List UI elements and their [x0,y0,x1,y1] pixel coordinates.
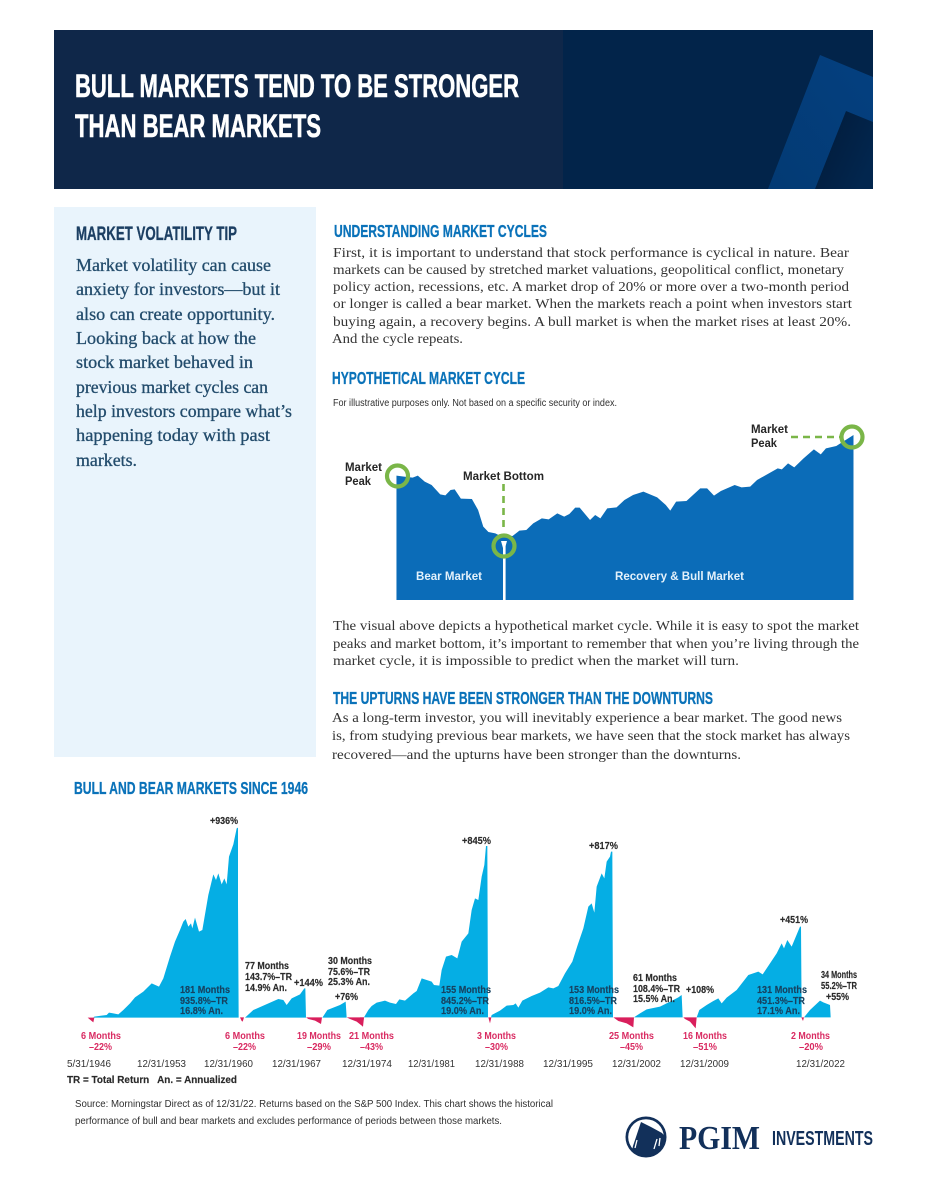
bull 2002 labels: 15.5% An. [633,994,675,1005]
logo: PGIM Investments [626,1116,873,1160]
marker: left market peak [387,466,408,486]
bull 1974 labels [441,836,491,1017]
text block: upturns [332,710,850,762]
bear market labels: 21 Months [349,1031,394,1042]
panel heading: MARKET VOLATILITY TIP [76,223,237,245]
chart: bull and bear markets since 1946 [67,816,858,1086]
text block: market cycles [332,245,852,346]
tip text: also can create opportunity. [76,304,275,324]
date axis: 12/31/1974 [342,1058,392,1070]
label: left market peak [345,460,382,488]
bull 2020 labels [821,970,858,1003]
text block: upturns: As a long-term investor, you will inevitably experience a bear market. The good news [332,710,842,725]
bull 2020 labels: +55% [826,992,849,1003]
bull 1987 labels: +817% [589,841,618,852]
bull 2020 labels: 34 Months [821,970,857,981]
chart key: TR = Total Return An. = Annualized [67,1074,237,1086]
source note: Source: Morningstar Direct as of 12/31/22. Returns based on the S&P 500 Index. This chart shows the historical [75,1099,553,1110]
bull market areas [93,828,831,1018]
label: right market peak: Market [751,422,788,436]
bull 1987 labels: 816.5%–TR [569,996,618,1007]
bull 1974 labels: +845% [462,836,491,847]
market peak dashed line [791,436,842,438]
bear market labels: –20% [799,1042,823,1053]
date axis [67,1058,845,1070]
logo: PGIM Investments: PGIM [679,1120,760,1157]
bull 1946 labels [180,816,238,1017]
bull 2002 labels: 108.4%–TR [633,984,681,995]
date axis: 5/31/1946 [67,1058,111,1070]
tip text: markets. [76,450,137,470]
bull 1970 labels [328,956,372,1003]
label: bear market: Bear Market [416,569,482,583]
bull 1987 labels: 153 Months [569,985,619,996]
heading: hypothetical market cycle: HYPOTHETICAL MARKET CYCLE [332,368,525,388]
bear market labels: –51% [693,1042,717,1053]
bull 1961 labels: +144% [294,978,323,989]
bull 2002 labels: +108% [686,985,714,996]
chart note: For illustrative purposes only. Not based on a specific security or index. [333,398,617,409]
bull 1961 labels [245,961,323,994]
date axis: 12/31/1981 [408,1058,455,1070]
label: right market peak [751,422,788,450]
bear market labels: 25 Months [609,1031,654,1042]
bear market labels: –43% [360,1042,383,1053]
bull 1961 labels: 77 Months [245,961,289,972]
marker: right market peak [842,426,862,448]
label: recovery and bull market: Recovery & Bull Market [615,569,744,583]
bull 1970 labels: 25.3% An. [328,977,370,988]
bull 1970 labels: 75.6%–TR [328,967,371,978]
bear market areas [88,1017,804,1028]
bear market labels: 6 Months [81,1031,121,1042]
panel: market volatility tip [54,207,316,757]
bull 2009 labels [757,915,808,1017]
date axis: 12/31/2022 [796,1058,845,1070]
bear market labels: 16 Months [683,1031,727,1042]
bear market labels: –30% [485,1042,508,1053]
date axis: 12/31/1960 [204,1058,253,1070]
bull 1961 labels: 14.9% An. [245,983,287,994]
text block: visual explanation: peaks and market bottom, it’s important to remember that when you’re living through the [333,636,859,651]
bear market labels: 3 Months [477,1031,516,1042]
text block: upturns: recovered—and the upturns have been stronger than the downturns. [332,747,741,762]
bull 1946 labels: 181 Months [180,985,230,996]
bull 1946 labels: 16.8% An. [180,1006,223,1017]
bear market labels: 6 Months [225,1031,265,1042]
bull 1946 labels: +936% [210,816,238,827]
market bottom dashed line [502,484,505,527]
bull 1974 labels: 845.2%–TR [441,996,490,1007]
label: market bottom: Market Bottom [463,469,544,483]
text block: visual explanation: The visual above depicts a hypothetical market cycle. While it is easy to spot the market [333,618,859,633]
date axis: 12/31/2002 [612,1058,661,1070]
marker: market bottom [494,536,514,556]
bull 1961 labels: 143.7%–TR [245,972,293,983]
tip text: help investors compare what’s [76,401,292,421]
label: right market peak: Peak [751,436,777,450]
bear market labels: –45% [620,1042,643,1053]
text block: market cycles: or longer is called a bear market. When the markets reach a point when investors start [333,296,852,311]
text block: market cycles: And the cycle repeats. [332,331,463,346]
bear market labels: –29% [307,1042,331,1053]
heading: understanding market cycles: UNDERSTANDING MARKET CYCLES [334,221,547,241]
text block: market cycles: buying again, a recovery begins. A bull market is when the market rises at least 20%. [333,314,851,329]
bear market labels: –22% [233,1042,256,1053]
text block: market cycles: policy action, recessions, etc. A market drop of 20% or more over a two-month period [333,279,849,294]
source note [75,1099,553,1127]
tip text: Looking back at how the [76,328,256,348]
date axis: 12/31/2009 [680,1058,729,1070]
bull 1974 labels: 155 Months [441,985,491,996]
tip text: anxiety for investors—but it [76,279,280,299]
tip text: stock market behaved in [76,352,253,372]
date axis: 12/31/1988 [475,1058,524,1070]
label: left market peak: Market [345,460,382,474]
date axis: 12/31/1953 [137,1058,186,1070]
bear market labels [81,1031,830,1053]
text block: market cycles: First, it is important to understand that stock performance is cyclical in nature. Bear [333,245,850,260]
tip text: happening today with past [76,425,270,445]
bull 2009 labels: 451.3%–TR [757,996,806,1007]
bull 1970 labels: 30 Months [328,956,372,967]
bull 1987 labels [569,841,619,1017]
tip text: Market volatility can cause [76,255,271,275]
heading: bull and bear markets since 1946: BULL AND BEAR MARKETS SINCE 1946 [74,778,308,798]
tip text: previous market cycles can [76,377,268,397]
bull 2002 labels: 61 Months [633,973,677,984]
bull 1987 labels: 19.0% An. [569,1006,612,1017]
bull 1946 labels: 935.8%–TR [180,996,229,1007]
title [75,68,519,144]
bear market labels: 19 Months [297,1031,341,1042]
text block: visual explanation [333,618,859,668]
date axis: 12/31/1967 [272,1058,321,1070]
bull 2020 labels: 55.2%–TR [821,981,858,992]
text block: market cycles: markets can be caused by stretched market valuations, geopolitical conflict, monetary [333,262,844,277]
source note: performance of bull and bear markets and excludes performance of periods between those markets. [75,1116,502,1127]
date axis: 12/31/1995 [543,1058,593,1070]
title: THAN BEAR MARKETS [75,108,321,144]
bull 2009 labels: 131 Months [757,985,807,996]
icon: header arrow graphic [768,55,873,189]
bull 1970 labels: +76% [335,992,358,1003]
text block: visual explanation: market cycle, it is impossible to predict when the market will turn. [333,653,739,668]
tip text [76,255,292,470]
logo: PGIM Investments: INVESTMENTS [772,1128,873,1150]
bull 2009 labels: +451% [780,915,808,926]
heading: upturns stronger than downturns: THE UPTURNS HAVE BEEN STRONGER THAN THE DOWNTURNS [333,688,713,708]
bull 1974 labels: 19.0% An. [441,1006,484,1017]
icon: rock emblem [626,1116,668,1160]
title: BULL MARKETS TEND TO BE STRONGER [75,68,519,104]
text block: upturns: is, from studying previous bear markets, we have seen that the stock market has always [332,728,850,743]
bear market labels: 2 Months [791,1031,830,1042]
chart: hypothetical market cycle [345,422,862,600]
bear market labels: –22% [89,1042,112,1053]
bull 2002 labels [633,973,714,1005]
bull 2009 labels: 17.1% An. [757,1006,800,1017]
header banner [54,30,873,189]
label: left market peak: Peak [345,474,371,488]
